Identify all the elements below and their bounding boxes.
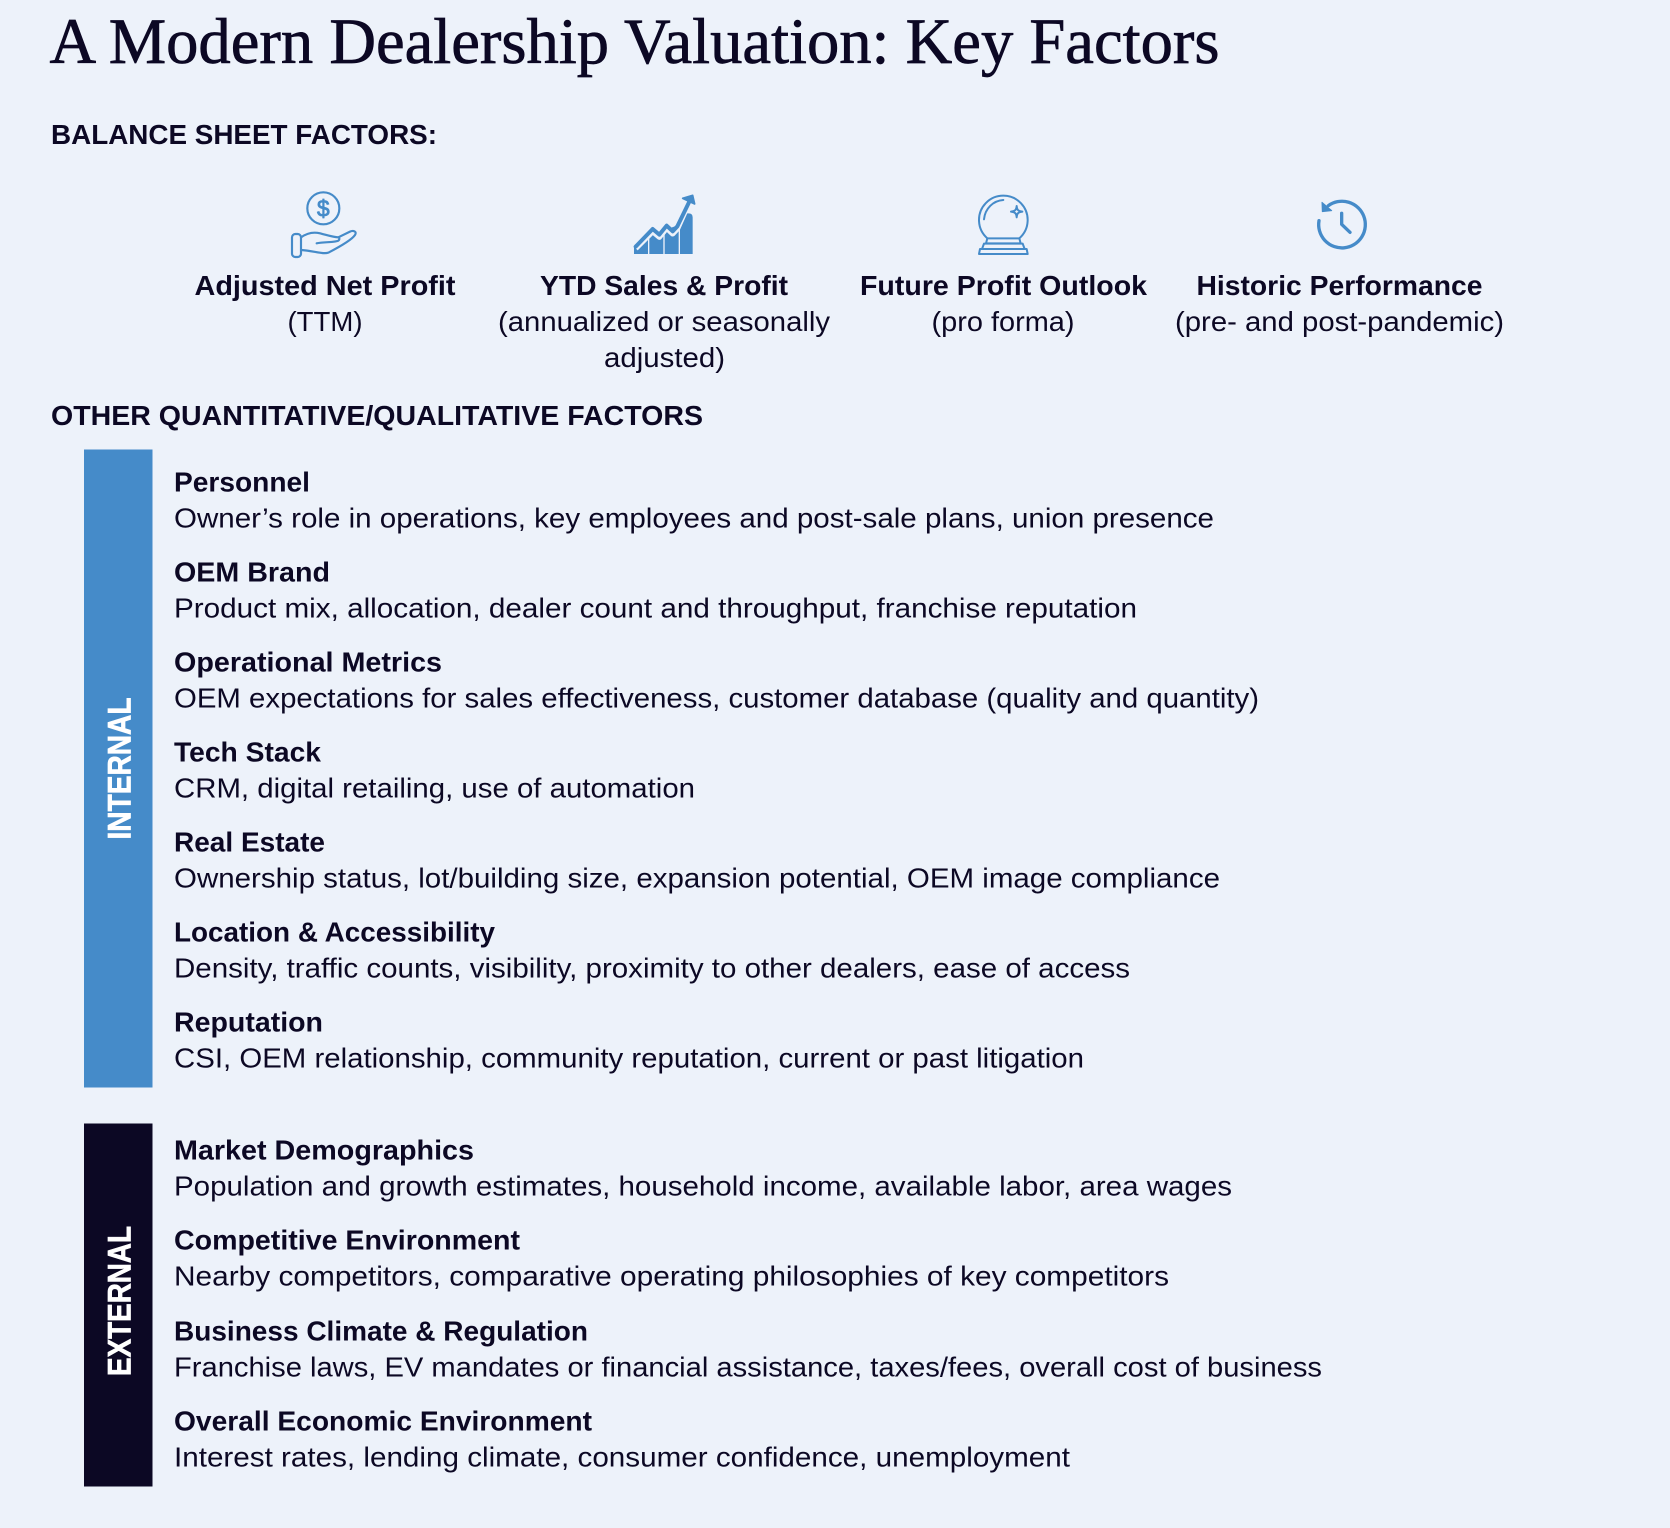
item: reputation — [174, 1006, 1084, 1074]
sublabel: annualized line one: (annualized or seasonally — [498, 306, 830, 337]
item: personnel: Owner’s role in operations, key employees and post-sale plans, union presence — [174, 502, 1214, 534]
item: OEM brand — [174, 556, 1137, 624]
item: reputation: CSI, OEM relationship, community reputation, current or past litigation — [174, 1042, 1084, 1074]
item: business climate and regulation: Franchise laws, EV mandates or financial assistance, taxes/fees, overall cost of business — [174, 1352, 1322, 1382]
item: tech stack — [174, 736, 695, 804]
panel: balance sheet factor columns — [194, 192, 1504, 373]
item: operational metrics: OEM expectations for sales effectiveness, customer database (quality and quantity) — [174, 682, 1259, 714]
item: business climate and regulation — [174, 1316, 1322, 1382]
sublabel: annualized line two: adjusted) — [604, 342, 725, 373]
item: operational metrics: Operational Metrics — [174, 646, 442, 678]
label: YTD sales and profit: YTD Sales & Profit — [540, 270, 788, 301]
title: A Modern Dealership Valuation: Key Factors — [50, 6, 1220, 78]
factor: future profit outlook — [860, 196, 1147, 337]
item: operational metrics — [174, 646, 1259, 714]
item: market demographics: Market Demographics — [174, 1134, 474, 1166]
panel: external factors — [84, 1124, 1322, 1486]
icon: rising bar chart with arrow — [634, 195, 695, 254]
item: competitive environment: Nearby competitors, comparative operating philosophies of key competitors — [174, 1260, 1169, 1292]
sublabel: pro forma: (pro forma) — [932, 306, 1074, 337]
label: future profit outlook: Future Profit Outlook — [860, 270, 1147, 301]
panel: internal factors — [84, 450, 1259, 1088]
item: location and accessibility — [174, 916, 1130, 984]
item: overall economic environment: Interest rates, lending climate, consumer confidence, unemployment — [174, 1442, 1070, 1472]
factor: YTD sales and profit — [498, 195, 830, 373]
item: real estate: Ownership status, lot/building size, expansion potential, OEM image compliance — [174, 862, 1220, 894]
label: historic performance: Historic Performance — [1196, 270, 1482, 301]
item: overall economic environment: Overall Economic Environment — [174, 1406, 592, 1436]
item: location and accessibility: Location & Accessibility — [174, 916, 495, 948]
sidebar: internal: INTERNAL — [102, 698, 138, 840]
sublabel: TTM: (TTM) — [288, 306, 362, 337]
heading: other factors: OTHER QUANTITATIVE/QUALITATIVE FACTORS — [51, 400, 703, 431]
item: tech stack: CRM, digital retailing, use of automation — [174, 772, 695, 804]
sidebar: external — [84, 1124, 152, 1486]
item: market demographics — [174, 1134, 1232, 1202]
sidebar: external: EXTERNAL — [102, 1226, 138, 1376]
item: competitive environment: Competitive Environment — [174, 1224, 520, 1256]
item: personnel — [174, 466, 1214, 534]
item: OEM brand: Product mix, allocation, dealer count and throughput, franchise reputation — [174, 592, 1137, 624]
item: reputation: Reputation — [174, 1006, 323, 1038]
item: competitive environment — [174, 1224, 1169, 1292]
factor: adjusted net profit — [194, 192, 456, 337]
icon: clock with counter-clockwise arrow — [1319, 201, 1365, 248]
heading: balance sheet factors: BALANCE SHEET FACTORS: — [51, 119, 437, 150]
item: location and accessibility: Density, traffic counts, visibility, proximity to other dealers, ease of access — [174, 952, 1130, 984]
item: business climate and regulation: Business Climate & Regulation — [174, 1316, 588, 1346]
icon: crystal ball — [979, 196, 1028, 254]
icon: hand holding coin: $ — [317, 195, 330, 221]
item: OEM brand: OEM Brand — [174, 556, 330, 588]
label: adjusted net profit: Adjusted Net Profit — [194, 270, 456, 301]
item: personnel: Personnel — [174, 466, 310, 498]
item: real estate: Real Estate — [174, 826, 325, 858]
item: overall economic environment — [174, 1406, 1070, 1472]
item: real estate — [174, 826, 1220, 894]
item: market demographics: Population and growth estimates, household income, available labor, area wages — [174, 1170, 1232, 1202]
sidebar: internal — [84, 450, 152, 1088]
icon: hand holding coin — [292, 192, 356, 257]
item: tech stack: Tech Stack — [174, 736, 321, 768]
sublabel: pre and post pandemic: (pre- and post-pandemic) — [1175, 306, 1504, 337]
factor: historic performance — [1175, 201, 1504, 337]
